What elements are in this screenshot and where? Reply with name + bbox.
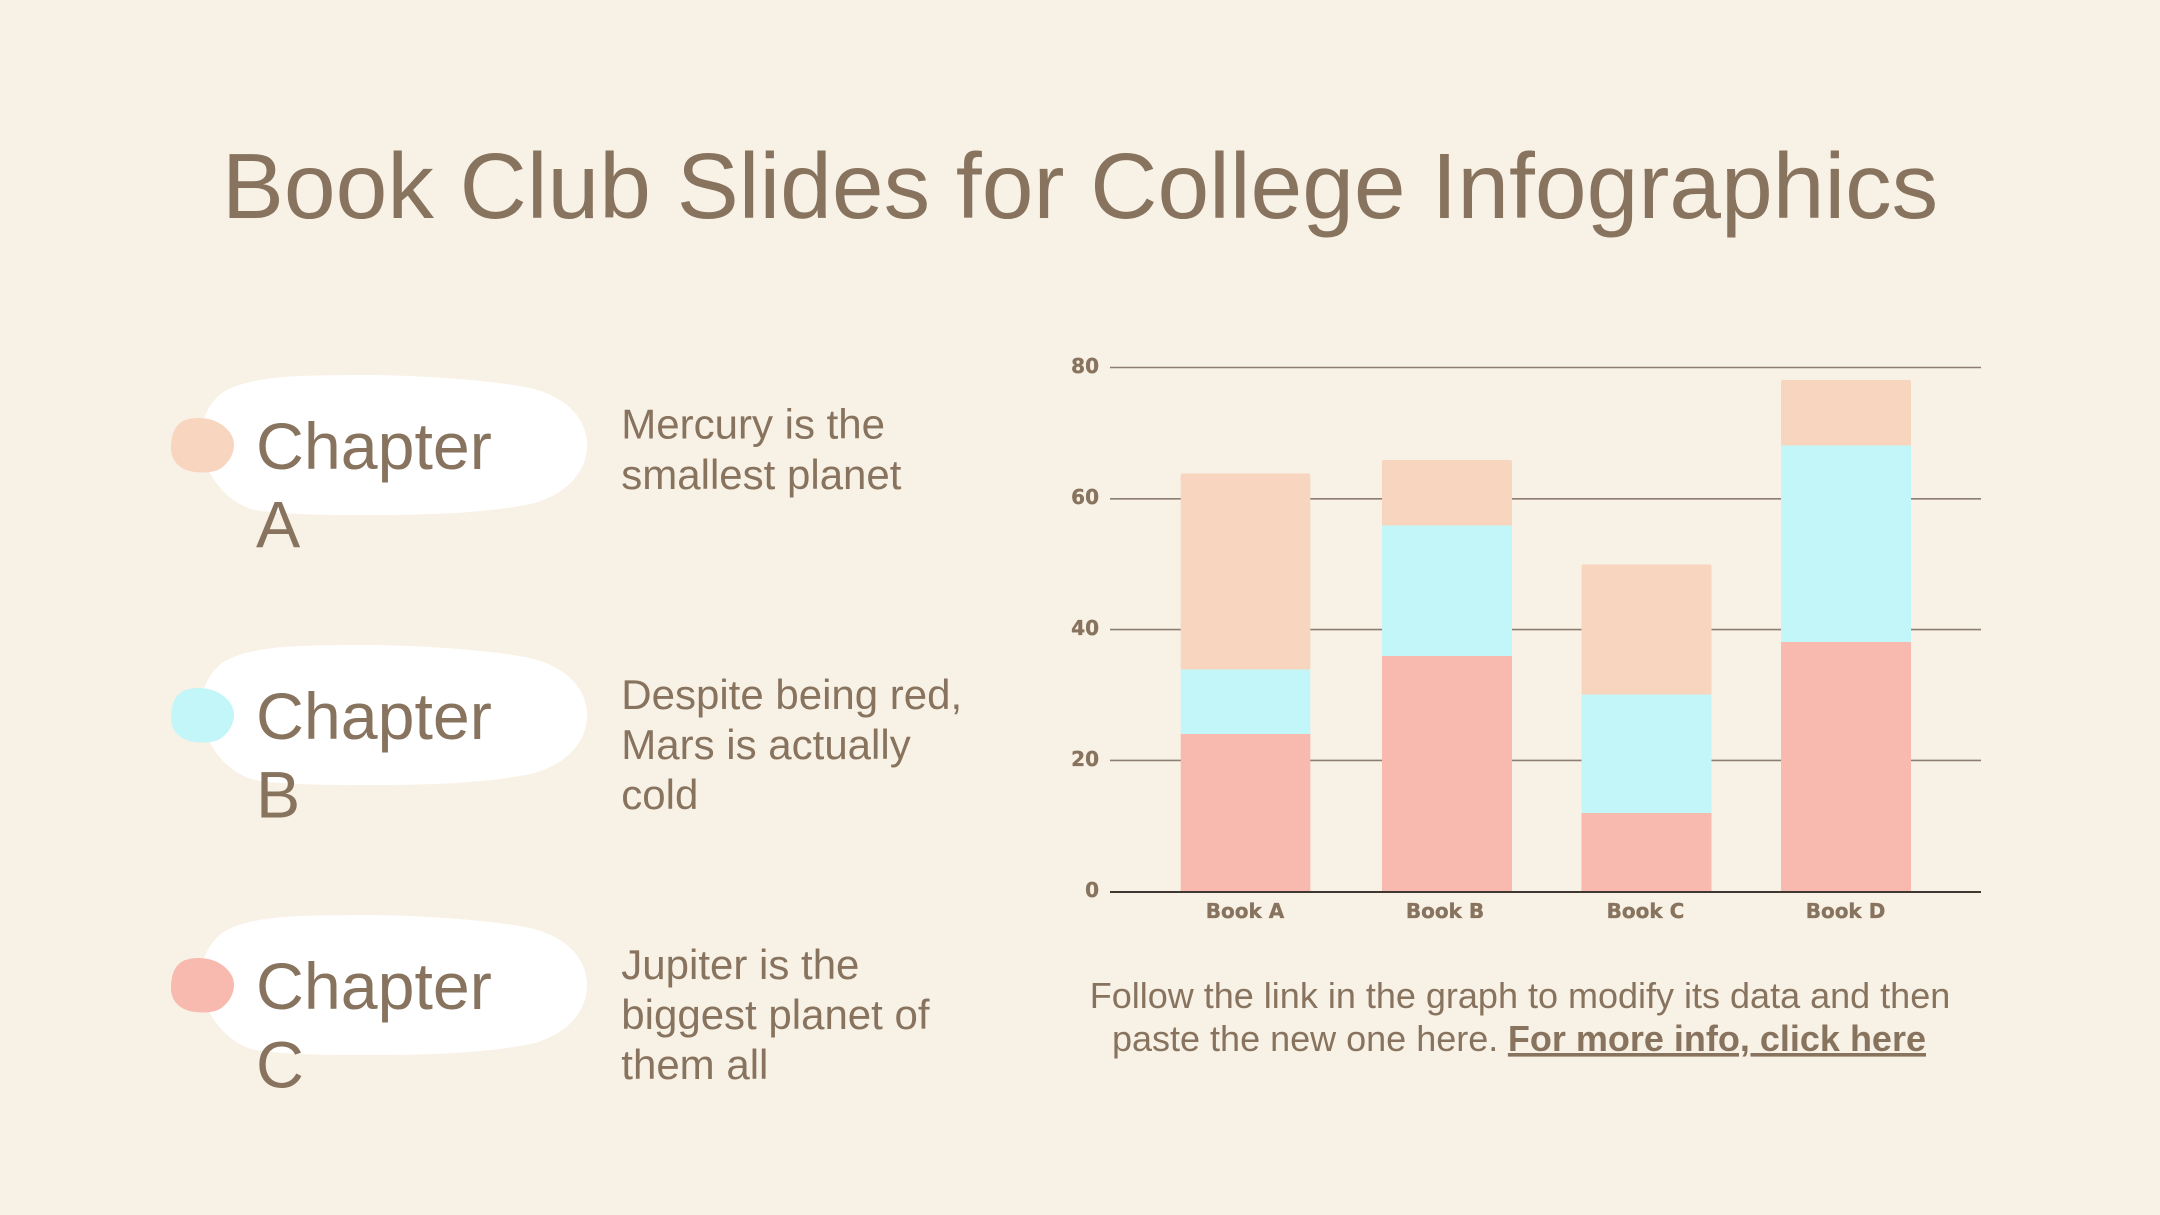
chapter B description: cold [621,771,698,818]
chapter C label background [201,915,587,1055]
x axis labels: Book D [1806,899,1885,923]
y axis labels [1071,354,1099,902]
chapter C heading: Chapter [256,950,492,1024]
chapter C description: Jupiter is the [621,941,859,988]
x axis labels: Book A [1206,899,1285,923]
caption: paste the new one here. [1112,1018,1508,1059]
bar: Book B [1382,460,1512,892]
caption: For more info, click here [1508,1018,1926,1059]
chapter A label background [201,375,587,515]
chapter A heading: A [256,488,301,562]
chapter C description: them all [621,1041,768,1088]
chapter B heading: B [256,758,300,832]
y axis labels: 20 [1071,747,1099,771]
y axis labels: 0 [1085,878,1099,902]
panel: chapter B [171,645,962,832]
bar: Book D [1781,380,1911,892]
chapter A description: smallest planet [621,451,902,498]
y axis labels: 40 [1071,616,1099,640]
bar: Book C [1582,564,1712,892]
x axis labels [1206,899,1885,923]
icon: cyan dot [171,688,234,742]
x axis labels: Book C [1607,899,1684,923]
chapter A description: Mercury is the [621,400,885,448]
chapter B heading: Chapter [256,680,492,754]
title: Book Club Slides for College Infographics [222,134,1938,238]
chapter B label background [201,645,587,785]
chapter A heading: Chapter [256,410,492,484]
panel: chapter C [171,915,930,1102]
stacked bar chart [1071,354,1981,923]
y axis labels: 80 [1071,354,1099,378]
panel: chapter A [171,375,902,562]
icon: pink dot [171,958,234,1012]
chapter C heading: C [256,1028,304,1102]
caption: Follow the link in the graph to modify its data and then [1090,975,1950,1016]
chapter B description: Despite being red, [621,671,962,718]
chapter C description: biggest planet of [621,991,930,1038]
icon: peach dot [171,418,234,472]
chapter B description: Mars is actually [621,721,911,768]
bar: Book A [1181,474,1310,892]
y axis labels: 60 [1071,485,1099,509]
x axis labels: Book B [1406,899,1484,923]
